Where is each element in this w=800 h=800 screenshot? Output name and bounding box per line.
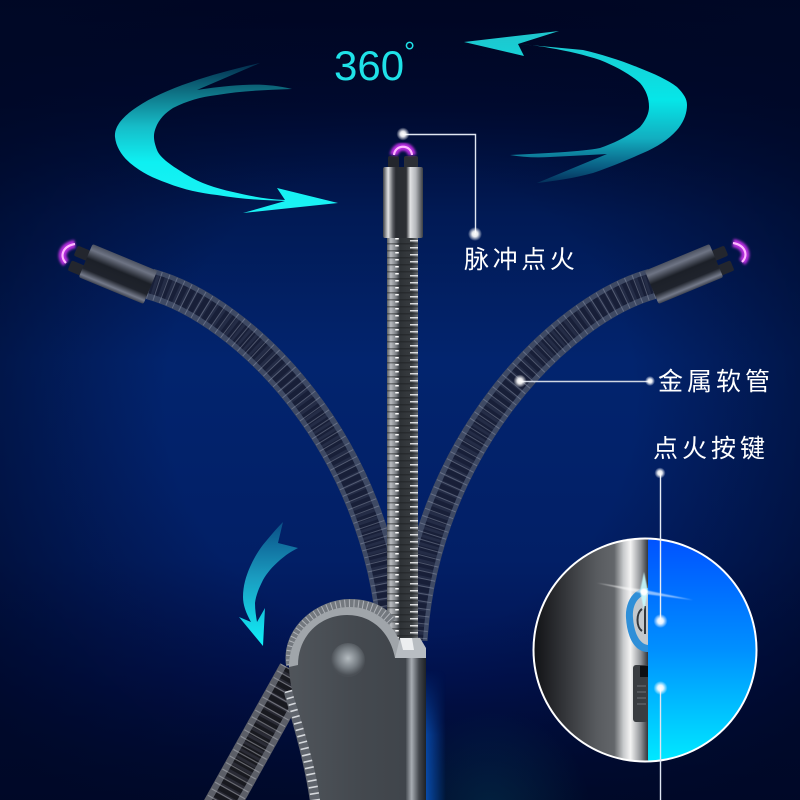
glow beside handle	[426, 676, 444, 800]
callout line: pulse ignition	[396, 128, 482, 241]
callout line: ignition button	[654, 468, 668, 628]
pivot knob	[331, 643, 365, 677]
callout line: charging port	[654, 681, 668, 800]
callout line: metal hose	[514, 374, 655, 388]
arrow: left rotation crescent	[115, 63, 338, 213]
arrow: right rotation crescent	[464, 31, 687, 183]
icon: sparkle	[597, 572, 693, 610]
rotation heading: 360 degrees: 360	[334, 42, 404, 89]
label: pulse ignition: 脉冲点火	[464, 246, 578, 274]
metal collar	[395, 638, 426, 658]
label: metal hose: 金属软管	[658, 368, 774, 396]
lighter head: left	[67, 239, 157, 304]
light arch	[289, 607, 403, 667]
icon: purple spark left	[63, 244, 75, 263]
side strip	[406, 658, 426, 800]
icon: purple spark centre	[394, 147, 412, 155]
ribbed side hose	[291, 690, 318, 800]
handle panel	[289, 608, 426, 800]
lighter handle body	[289, 604, 426, 800]
lighter head: centre	[383, 147, 423, 238]
lighter head: right	[645, 239, 735, 304]
hose: lower left behind body	[218, 672, 296, 800]
zoom circle: button detail	[532, 538, 758, 762]
arrow: downward bend	[239, 522, 298, 646]
icon: purple spark right	[733, 243, 745, 262]
ribbed hinge hose	[291, 604, 392, 665]
rotation heading: 360 degrees: °	[404, 36, 415, 67]
hose: curved right	[412, 283, 653, 640]
hose: centre vertical	[387, 236, 418, 640]
power button	[626, 588, 648, 652]
label: ignition button: 点火按键	[653, 435, 769, 463]
hose: curved left	[149, 283, 393, 640]
usb slider	[633, 665, 648, 722]
